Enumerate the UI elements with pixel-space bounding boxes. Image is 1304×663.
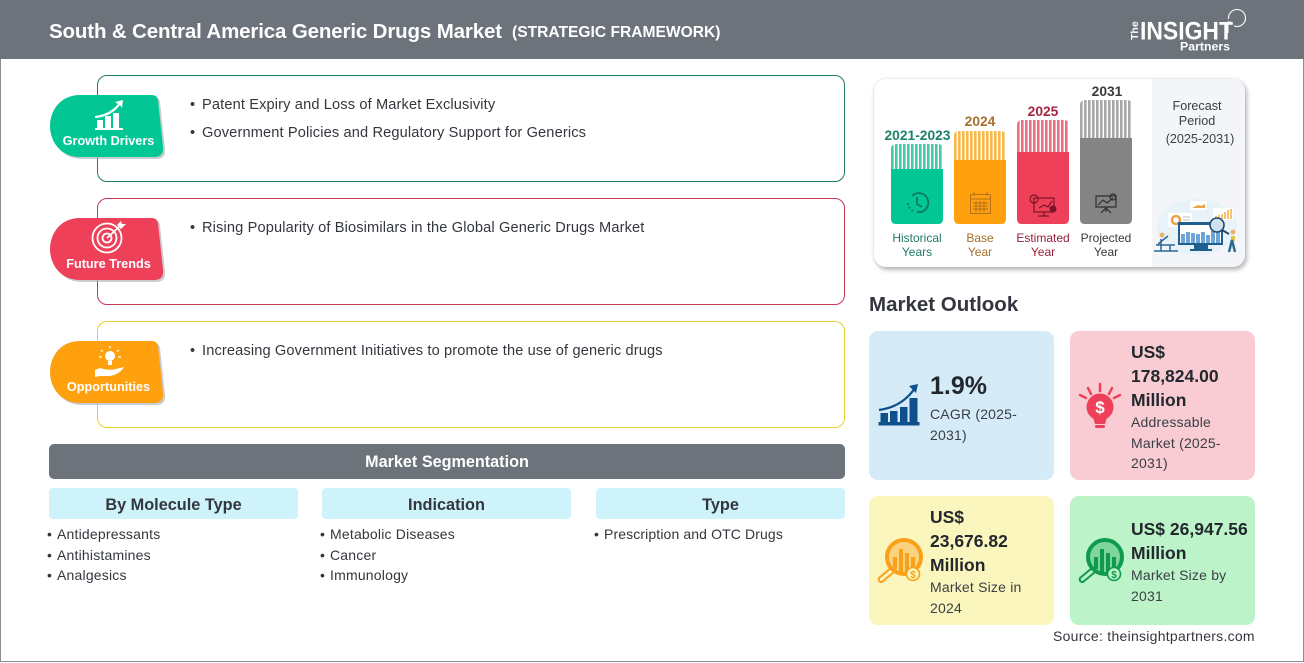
description: 2031) <box>930 426 967 442</box>
title: South & Central America Generic Drugs Market <box>49 20 502 43</box>
tab: growth drivers: Growth Drivers <box>63 134 154 148</box>
driver text: Government Policies and Regulatory Support for Generics <box>202 125 586 141</box>
subtitle: (STRATEGIC FRAMEWORK) <box>512 24 720 41</box>
label: base year: Year <box>968 245 992 259</box>
segment list: indication: • <box>320 526 325 542</box>
logo <box>1129 9 1246 54</box>
tab: future trends <box>50 218 166 282</box>
description <box>930 406 1017 443</box>
driver text: Patent Expiry and Loss of Market Exclusivity <box>202 97 495 113</box>
segment list: molecule: Analgesics <box>57 567 127 583</box>
icon: magnifier chart: $ <box>910 570 916 581</box>
panel outline <box>97 198 845 305</box>
description: Market (2025- <box>1131 434 1221 450</box>
bar chart: timeline <box>891 100 1237 255</box>
value: US$ 26,947.56 <box>1131 519 1248 539</box>
segment list: molecule: Antidepressants <box>57 526 160 542</box>
description: Market Size by <box>1131 567 1226 583</box>
segment list: molecule <box>47 526 160 583</box>
panel: future trends <box>50 198 845 305</box>
trend text: Rising Popularity of Biosimilars in the Global Generic Drugs Market <box>202 220 644 236</box>
heading: market outlook: Market Outlook <box>869 293 1018 316</box>
label: 2021-2023: 2021-2023 <box>884 128 950 143</box>
card: market size 2031 <box>1070 496 1255 625</box>
header band <box>0 0 1304 59</box>
description: CAGR (2025- <box>930 406 1017 422</box>
heading: market segmentation: Market Segmentation <box>365 453 529 471</box>
description: 2031) <box>1131 455 1168 471</box>
tab: future trends: Future Trends <box>66 257 151 271</box>
logo: INSIGHT <box>1140 18 1233 46</box>
value: US$ <box>930 507 964 527</box>
card: addressable market <box>1070 331 1255 480</box>
value: 178,824.00 <box>1131 366 1219 386</box>
tab: opportunities <box>50 341 166 405</box>
segment list: molecule: Antihistamines <box>57 547 151 563</box>
description <box>930 579 1022 616</box>
bar: projected <box>1080 100 1132 224</box>
bar: estimated <box>1017 120 1069 224</box>
value: US$ <box>1131 342 1165 362</box>
segment list: type: Prescription and OTC Drugs <box>604 526 783 542</box>
segment list: molecule: • <box>47 547 52 563</box>
segment list: indication: • <box>320 547 325 563</box>
label: historical years: Years <box>902 245 932 259</box>
label: estimated year: Year <box>1031 245 1055 259</box>
driver text: • <box>190 97 195 113</box>
description <box>1131 567 1226 604</box>
trend text: • <box>190 220 195 236</box>
icon: dollar bulb <box>1078 382 1122 428</box>
tab: opportunities: Opportunities <box>67 380 150 394</box>
segment list: indication: Cancer <box>330 547 376 563</box>
label: base year: Base <box>966 231 994 245</box>
segment heading: indication: Indication <box>408 496 485 514</box>
label: 2025: 2025 <box>1028 104 1058 119</box>
logo: The <box>1129 21 1141 40</box>
segment heading: type <box>596 488 845 519</box>
label: estimated year <box>1016 231 1070 259</box>
panel: opportunities <box>50 321 845 428</box>
segment list: indication: • <box>320 567 325 583</box>
icon: dollar bulb: $ <box>1095 398 1105 417</box>
label: base year <box>966 231 994 259</box>
value: Million <box>1131 543 1186 563</box>
segment heading: type: Type <box>702 496 739 514</box>
icon: growth chart <box>878 384 920 426</box>
label: projected year: Year <box>1094 245 1118 259</box>
label: historical years: Historical <box>892 231 942 245</box>
panel outline <box>97 321 845 428</box>
card: market size 2024 <box>869 496 1054 625</box>
forecast period label: (2025-2031) <box>1166 132 1234 146</box>
value: Million <box>930 555 985 575</box>
segment list: molecule: • <box>47 567 52 583</box>
panel: timeline chart <box>874 79 1245 267</box>
description: 2024 <box>930 600 962 616</box>
forecast period label: Forecast <box>1172 99 1222 113</box>
segment list: type: • <box>594 526 599 542</box>
opportunity text: • <box>190 343 195 359</box>
value <box>930 507 1008 575</box>
logo: Partners <box>1180 40 1230 54</box>
description: Market Size in <box>930 579 1022 595</box>
panel: growth drivers <box>50 75 845 182</box>
panel outline <box>97 75 845 182</box>
icon: magnifier chart <box>878 538 923 583</box>
label: 2024: 2024 <box>965 114 995 129</box>
heading: market segmentation <box>49 444 845 479</box>
value <box>1131 519 1248 563</box>
description: Addressable <box>1131 414 1211 430</box>
segment heading: indication <box>322 488 571 519</box>
source note: Source: theinsightpartners.com <box>1053 628 1255 644</box>
description <box>1131 414 1221 471</box>
bar: base <box>954 131 1006 224</box>
tab: growth drivers <box>50 95 166 159</box>
label: estimated year: Estimated <box>1016 231 1070 245</box>
forecast period label: Period <box>1179 114 1215 128</box>
opportunity text: Increasing Government Initiatives to promote the use of generic drugs <box>202 343 663 359</box>
value: 1.9% <box>930 372 987 400</box>
card: CAGR <box>869 331 1054 480</box>
label: 2031: 2031 <box>1092 84 1122 99</box>
segment heading: by molecule type: By Molecule Type <box>105 496 242 514</box>
label: projected year <box>1081 231 1131 259</box>
driver text: • <box>190 125 195 141</box>
icon: magnifier chart <box>1078 538 1124 583</box>
segment list: indication <box>320 526 455 583</box>
value <box>1131 342 1219 410</box>
bar: historical <box>891 144 943 224</box>
value: Million <box>1131 390 1186 410</box>
value: 23,676.82 <box>930 531 1008 551</box>
label: projected year: Projected <box>1081 231 1131 245</box>
icon: magnifier chart: $ <box>1111 570 1117 581</box>
description: 2031 <box>1131 588 1163 604</box>
segment heading: by molecule type <box>49 488 298 519</box>
segment list: indication: Metabolic Diseases <box>330 526 455 542</box>
forecast side panel <box>1152 79 1245 267</box>
icon: analyst at dashboard <box>1154 199 1237 255</box>
segment list: indication: Immunology <box>330 567 408 583</box>
segment list: molecule: • <box>47 526 52 542</box>
forecast period label <box>1166 99 1234 146</box>
label: historical years <box>892 231 942 259</box>
